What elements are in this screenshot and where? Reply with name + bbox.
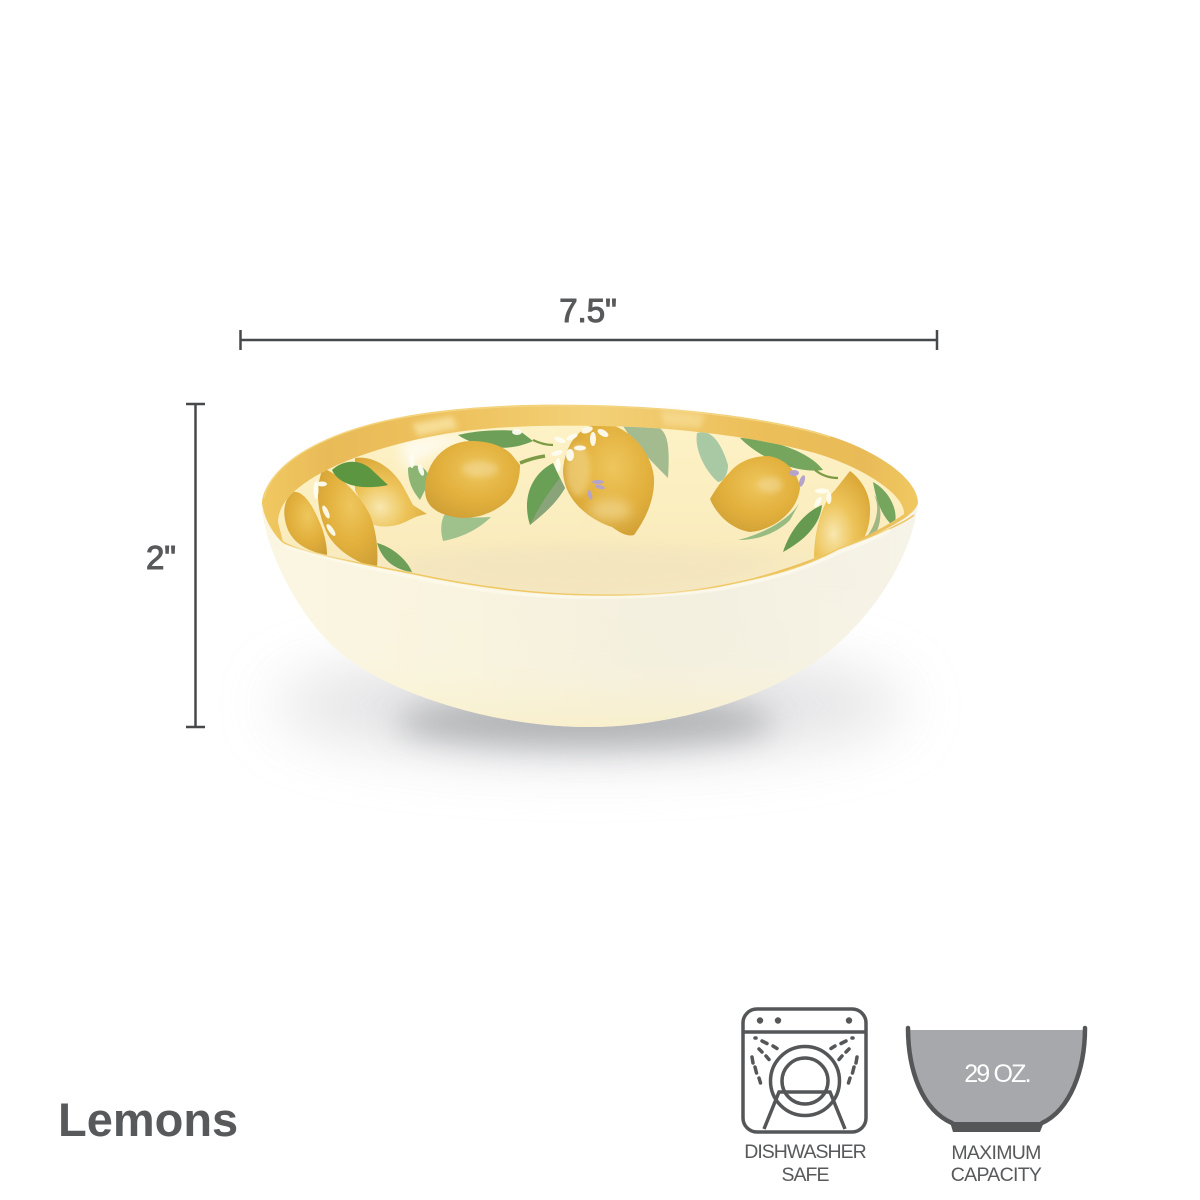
icon: capacity bowl: 29 OZ. bbox=[964, 1060, 1030, 1088]
body lower tint bbox=[261, 502, 918, 727]
width dimension: 7.5" bbox=[559, 292, 617, 329]
front lip sheen bbox=[285, 530, 890, 597]
label: dishwasher safe: DISHWASHER bbox=[744, 1141, 867, 1163]
lemon right bbox=[710, 456, 800, 532]
lemon center highlight bbox=[462, 461, 498, 477]
green leaf on left lemons bbox=[332, 462, 388, 487]
interior floor swirl bbox=[395, 547, 775, 594]
stems bbox=[519, 439, 838, 480]
purple buds bbox=[587, 470, 806, 500]
rim outer highlight bbox=[264, 406, 830, 498]
lemon bowl bbox=[261, 405, 918, 727]
infographic canvas bbox=[61, 298, 1088, 1181]
product name: Lemons bbox=[58, 1093, 238, 1146]
interior glare bbox=[400, 435, 470, 470]
lemon big center bbox=[563, 425, 654, 536]
lemon back left bbox=[355, 458, 427, 526]
lemon big left wash bbox=[566, 444, 590, 496]
rim glare right bbox=[660, 410, 705, 428]
lemon big highlight bbox=[588, 499, 632, 521]
lemon right highlight bbox=[758, 477, 782, 493]
blossoms bbox=[314, 425, 832, 537]
label: dishwasher safe: SAFE bbox=[782, 1164, 829, 1186]
lemon left large bbox=[318, 468, 377, 567]
yellow rim bbox=[262, 405, 918, 595]
label: maximum capacity: CAPACITY bbox=[951, 1164, 1042, 1186]
lemon decoration bbox=[284, 426, 896, 572]
bowl shadow bbox=[275, 653, 905, 757]
cream interior bbox=[278, 426, 904, 595]
front lip line bbox=[264, 510, 914, 595]
lemon center bbox=[425, 441, 520, 518]
bowl body bbox=[261, 502, 918, 727]
leaves bbox=[377, 426, 896, 572]
icon: capacity bowl bbox=[908, 1028, 1085, 1132]
lemon far right bbox=[814, 471, 870, 558]
lemon left small bbox=[284, 492, 327, 555]
rim glare bbox=[412, 416, 458, 436]
label: maximum capacity: MAXIMUM bbox=[951, 1142, 1041, 1164]
height dimension: 2" bbox=[146, 539, 176, 576]
icon: dishwasher bbox=[743, 1009, 866, 1132]
